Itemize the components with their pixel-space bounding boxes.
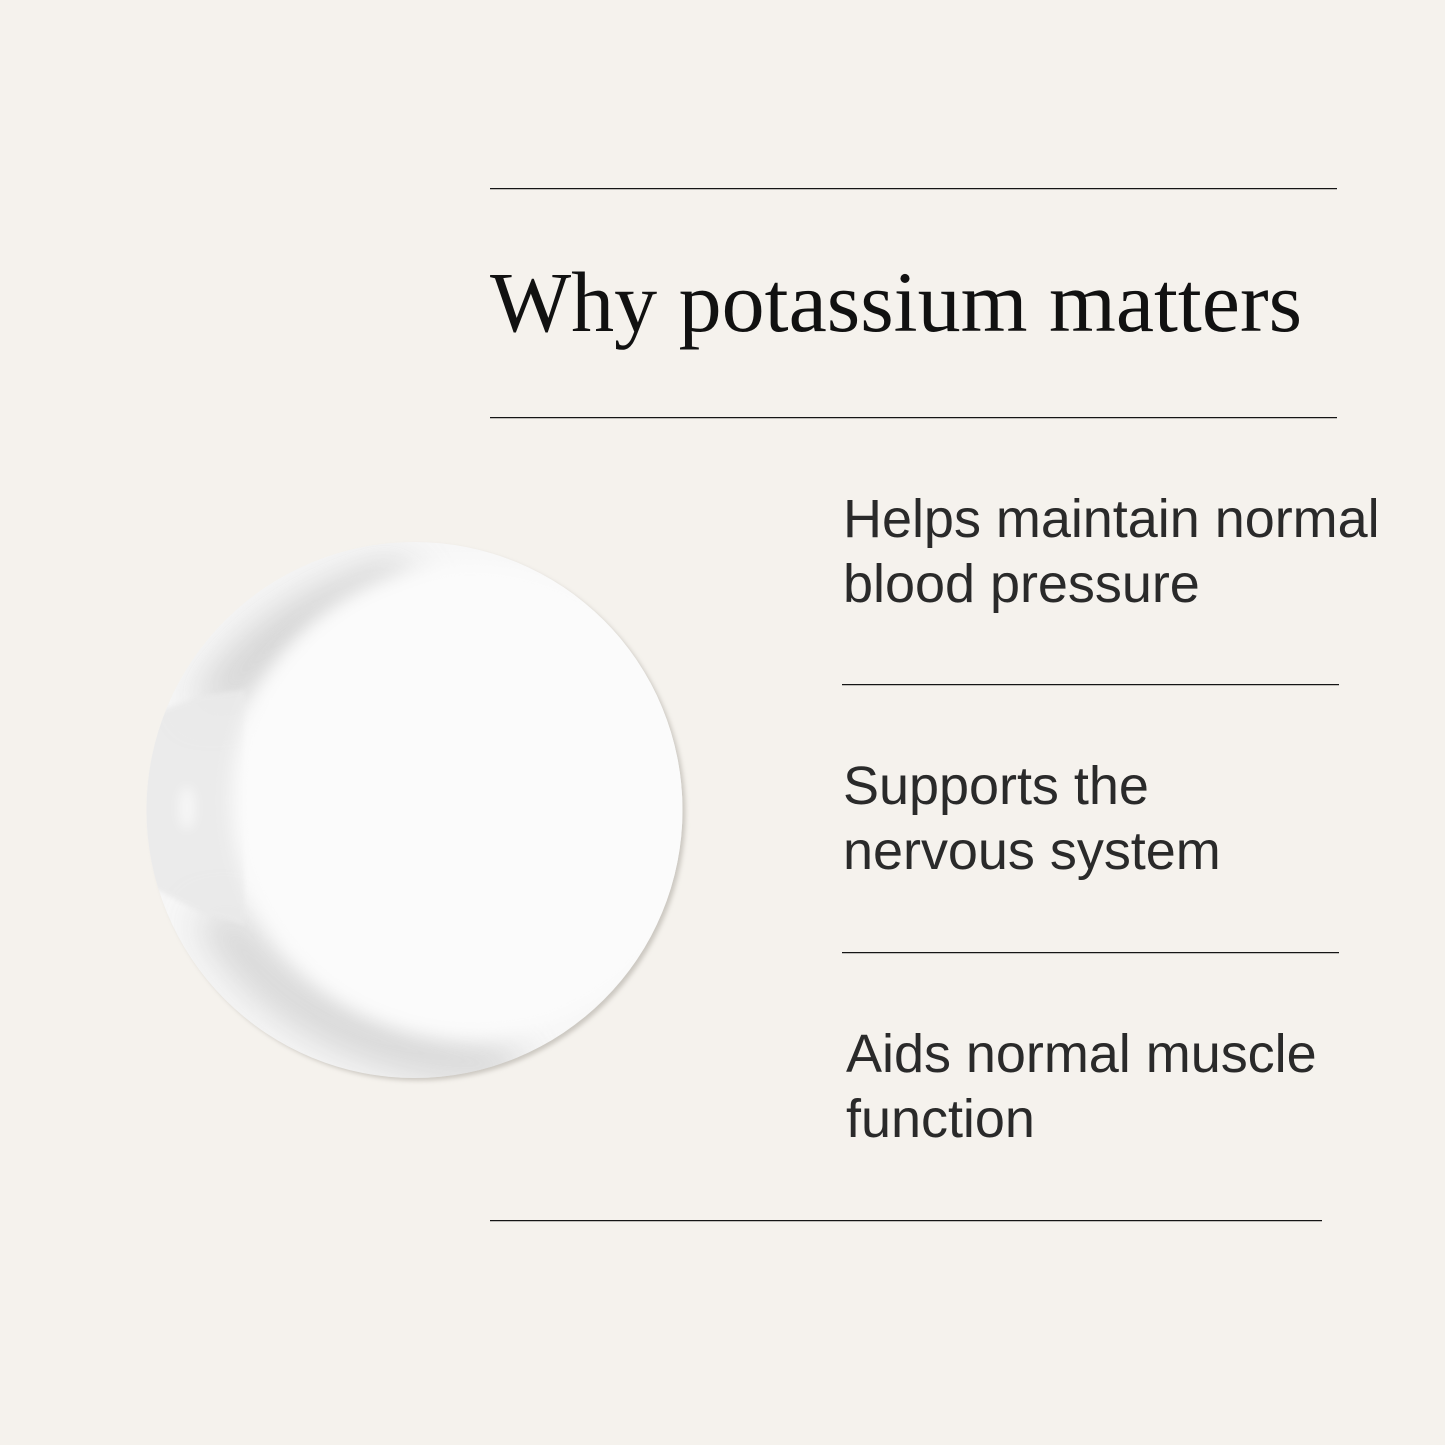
left panel — [146, 707, 240, 904]
text block: muscle function: Aids normal muscle — [846, 1024, 1317, 1084]
inner powder surface — [232, 562, 708, 1038]
top-left shadow — [190, 560, 430, 710]
text block: muscle function: function — [846, 1089, 1035, 1149]
bright reflection — [183, 798, 191, 818]
bottom-left shadow — [195, 910, 520, 1085]
text block: blood pressure: Helps maintain normal — [843, 489, 1380, 549]
text block: nervous system: Supports the — [843, 756, 1149, 816]
text block: muscle function — [846, 1024, 1317, 1149]
icon: white powder circle — [146, 542, 688, 1082]
title: Why potassium matters — [490, 254, 1302, 350]
text block: nervous system: nervous system — [843, 821, 1221, 881]
text block: nervous system — [843, 756, 1221, 881]
text block: blood pressure: blood pressure — [843, 554, 1200, 614]
text block: blood pressure — [843, 489, 1380, 614]
